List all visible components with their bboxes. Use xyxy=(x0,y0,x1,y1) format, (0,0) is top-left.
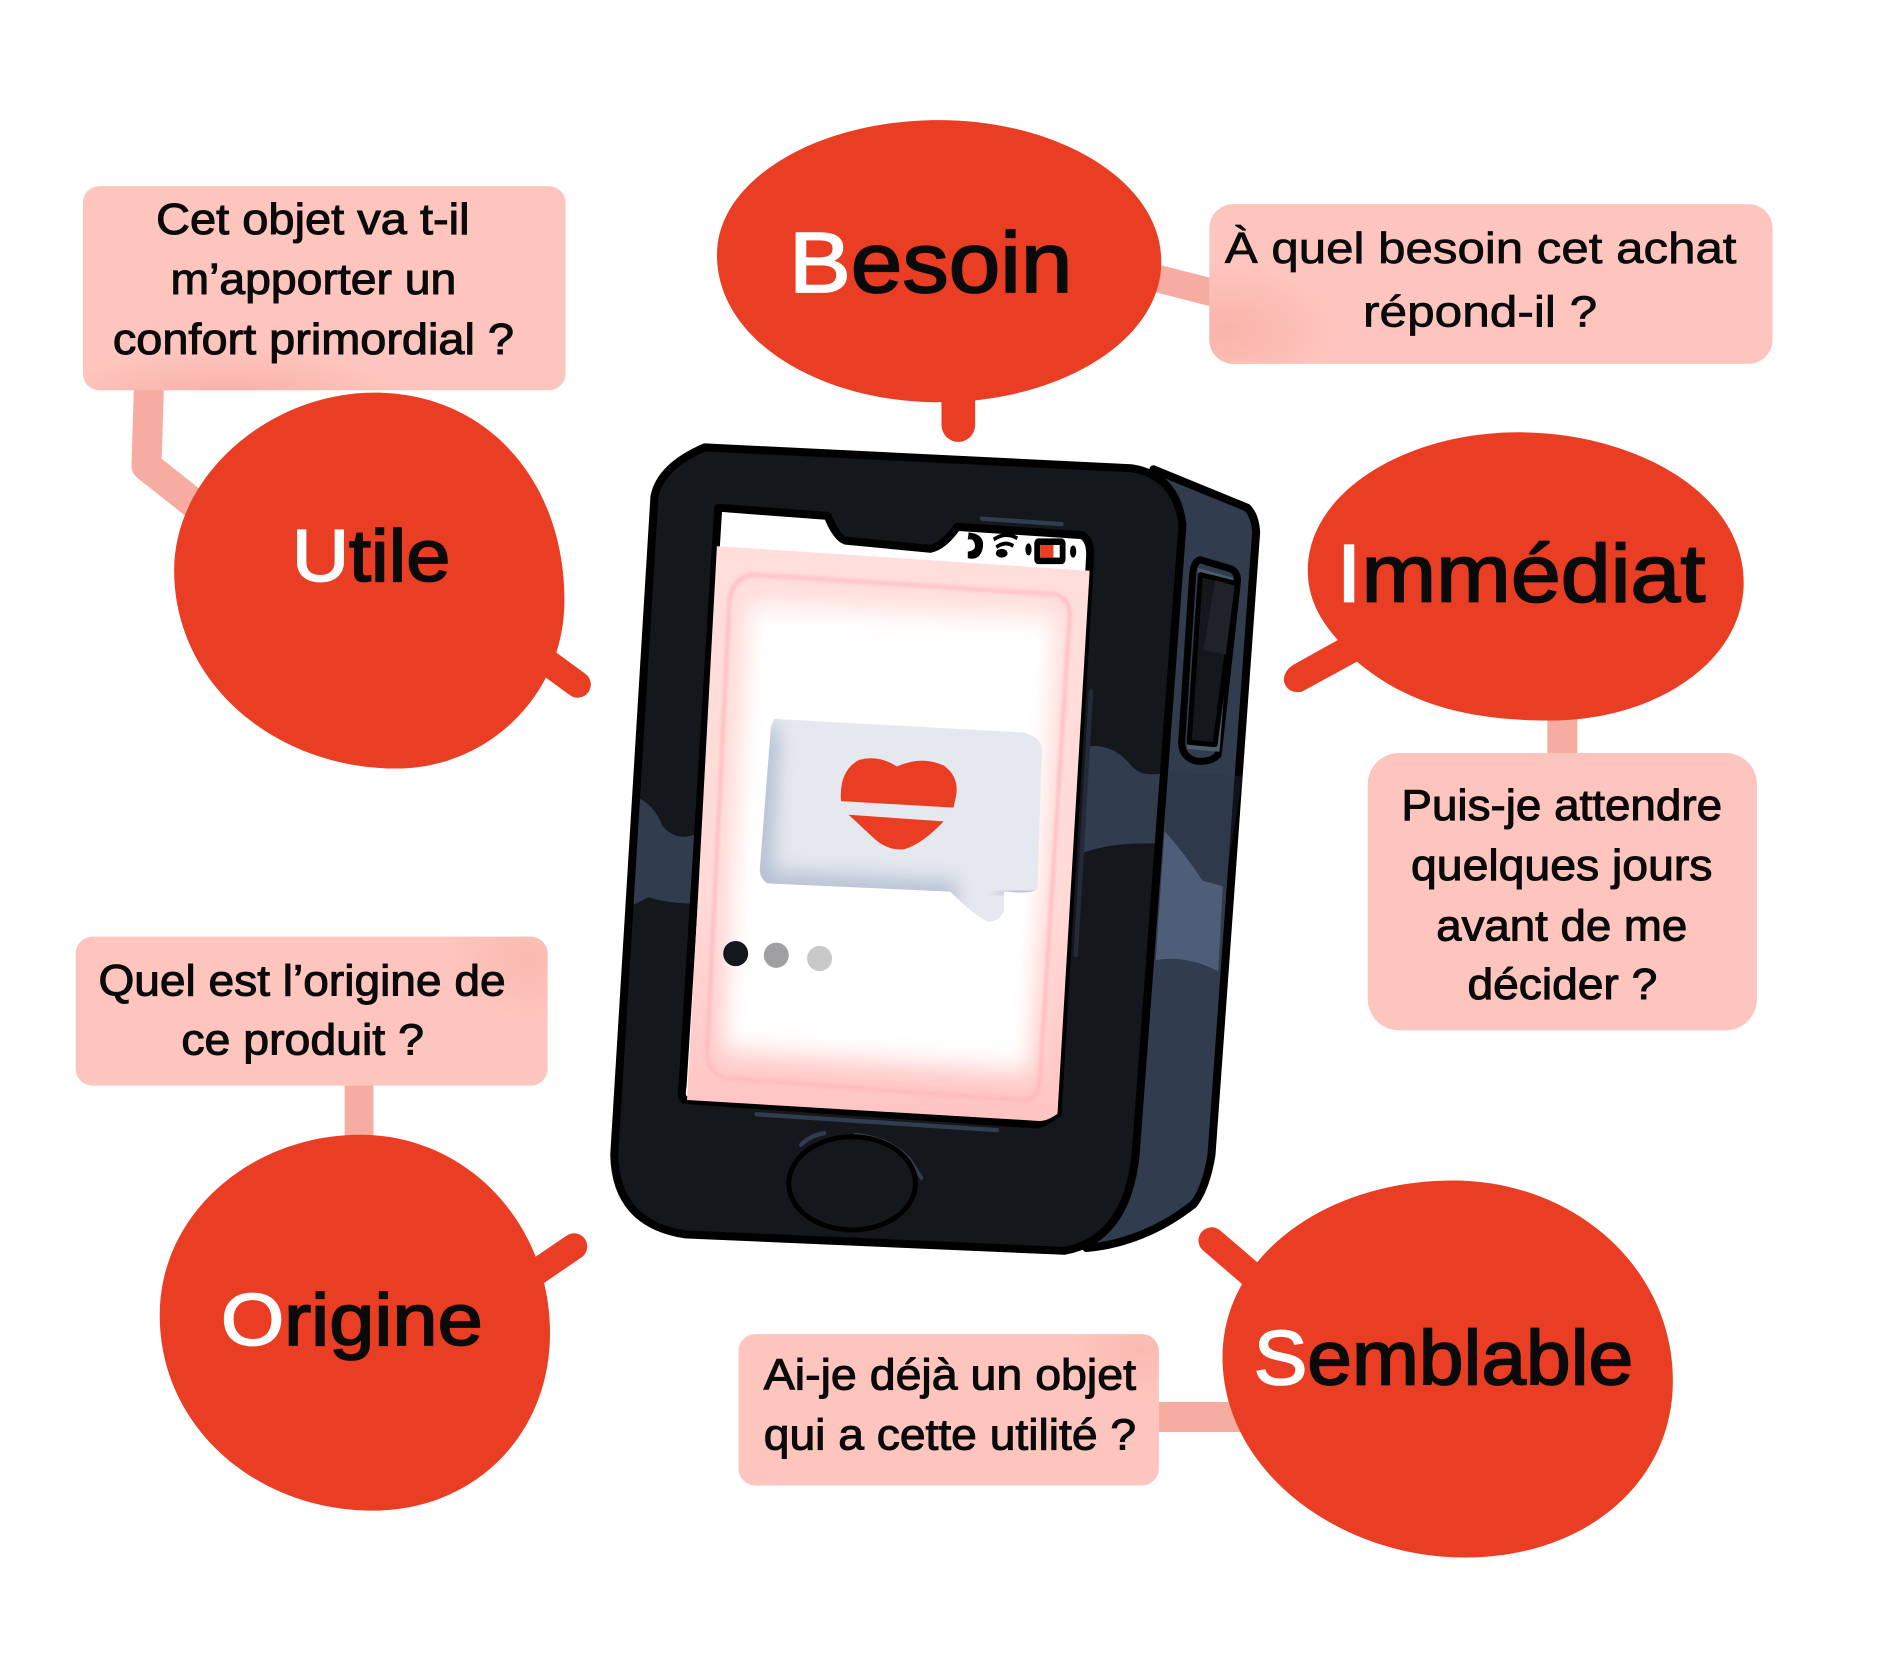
pagination dots xyxy=(723,941,832,971)
question text: Immédiat: Puis-je attendre xyxy=(1401,782,1722,830)
home button xyxy=(789,1137,916,1230)
screen pink glow xyxy=(687,546,1090,1121)
question text: Semblable: Ai-je déjà un objet xyxy=(764,1351,1136,1399)
question text: Immédiat: avant de me xyxy=(1436,902,1687,950)
phone front body xyxy=(614,447,1182,1251)
question text: Besoin xyxy=(1225,225,1736,337)
question box: Besoin xyxy=(1209,204,1772,364)
connector: Origine to its question xyxy=(347,1081,371,1147)
question box: Utile xyxy=(82,186,566,390)
side dark wave xyxy=(1159,771,1243,886)
question text: Besoin: répond-il ? xyxy=(1363,289,1597,337)
heading: Semblable: Semblable xyxy=(1254,1316,1633,1402)
question text: Immédiat xyxy=(1401,782,1722,1009)
phone side panel xyxy=(1069,469,1256,1248)
question text: Utile: Cet objet va t-il xyxy=(156,196,470,244)
question box: Immédiat xyxy=(1368,753,1757,1030)
question text: Origine xyxy=(98,958,506,1064)
bubble: Utile xyxy=(174,393,578,769)
question box: Semblable xyxy=(738,1334,1159,1486)
connector: Besoin to its question xyxy=(1153,277,1219,294)
icon: heart xyxy=(841,758,957,849)
illustration: smartphone xyxy=(614,447,1256,1251)
bubble: Immédiat xyxy=(1284,432,1744,721)
question text: Besoin: À quel besoin cet achat xyxy=(1225,225,1736,273)
phone front outline xyxy=(614,447,1182,1251)
connector: Semblable to its question xyxy=(1153,1405,1243,1430)
question text: Semblable xyxy=(764,1351,1136,1459)
question text: Origine: ce produit ? xyxy=(181,1016,424,1064)
bubble: Besoin xyxy=(717,120,1161,425)
status bar icons xyxy=(968,532,1076,564)
question text: Immédiat: décider ? xyxy=(1467,961,1657,1009)
heading: Besoin: Besoin xyxy=(789,216,1072,311)
side highlight band xyxy=(1156,831,1223,971)
question text: Utile: confort primordial ? xyxy=(113,316,514,364)
chat bubble xyxy=(758,719,1046,922)
question text: Utile: m’apporter un xyxy=(171,256,456,304)
bezel accents xyxy=(756,519,1091,1178)
heading: Origine: Origine xyxy=(221,1279,483,1361)
question box: Origine xyxy=(76,936,548,1086)
screen xyxy=(682,508,1090,1125)
connector: Utile to its question xyxy=(147,387,210,516)
question text: Immédiat: quelques jours xyxy=(1411,842,1712,890)
heading: Utile: Utile xyxy=(292,515,450,597)
bubble: Origine xyxy=(160,1135,574,1511)
body reflections xyxy=(627,746,1180,908)
side switch xyxy=(1182,560,1237,761)
question text: Semblable: qui a cette utilité ? xyxy=(764,1411,1136,1459)
connector: Immédiat to its question xyxy=(1550,715,1575,759)
heading: Immédiat: Immédiat xyxy=(1337,529,1706,620)
bubble: Semblable xyxy=(1212,1180,1673,1558)
question text: Utile xyxy=(113,196,514,364)
question text: Origine: Quel est l’origine de xyxy=(98,958,506,1006)
